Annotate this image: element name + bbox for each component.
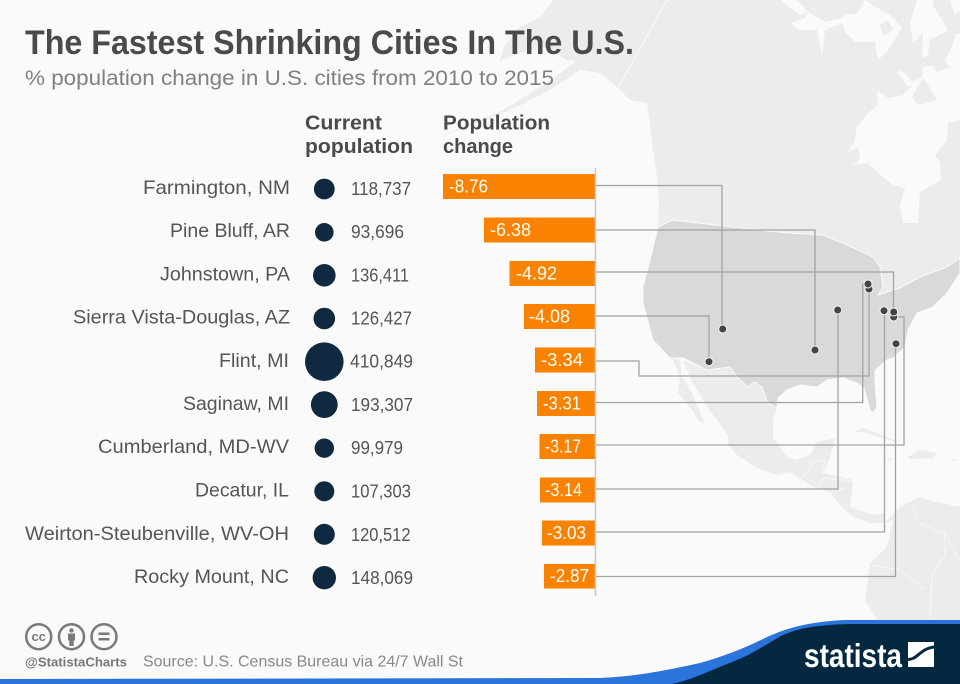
row: Pine Bluff, AR: Pine Bluff, AR: [170, 220, 290, 242]
row: Saginaw, MI: -3.31: [543, 394, 581, 414]
row: Weirton-Steubenville, WV-OH: -3.03: [547, 523, 586, 543]
row: Pine Bluff, AR: [170, 218, 595, 242]
row: Pine Bluff, AR: 93,696: [351, 222, 404, 242]
connector lines from bars to cities: [595, 186, 904, 576]
map: South America borders: [872, 505, 960, 620]
map: South America: [865, 497, 960, 625]
row: Johnstown, PA: -4.92: [516, 264, 557, 284]
row: Rocky Mount, NC: [134, 564, 595, 589]
row: Decatur, IL: 107,303: [351, 482, 411, 502]
column heading: population change: change: [443, 136, 513, 158]
icon: creative commons: [26, 624, 51, 649]
statista logo wordmark: statista: [804, 637, 903, 674]
row: Farmington, NM: -8.76: [449, 177, 488, 197]
row: Johnstown, PA: Johnstown, PA: [160, 264, 290, 286]
map: Central America borders: [803, 460, 853, 490]
icon: creative commons: cc: [31, 629, 46, 644]
row: Flint, MI: -3.34: [541, 350, 583, 370]
map: Arctic channels: [780, 0, 960, 87]
column heading: current population: Current: [305, 112, 382, 134]
column heading: current population: [305, 112, 413, 158]
row: Johnstown, PA: 136,411: [351, 266, 409, 286]
row: Decatur, IL: -3.14: [545, 480, 582, 500]
footer band: navy panel: [672, 624, 960, 684]
map: Southampton Island: [912, 78, 937, 105]
row: Farmington, NM: Farmington, NM: [143, 177, 290, 199]
row: Decatur, IL: Decatur, IL: [195, 480, 289, 502]
row: Saginaw, MI: [183, 391, 595, 418]
column heading: population change: Population: [443, 112, 550, 134]
row: Cumberland, MD-WV: [98, 434, 595, 459]
row: Farmington, NM: 118,737: [351, 179, 411, 199]
row: Saginaw, MI: Saginaw, MI: [183, 393, 289, 415]
column heading: current population: population: [305, 136, 413, 158]
icon: no derivatives: [92, 624, 116, 649]
row: Sierra Vista-Douglas, AZ: 126,427: [351, 308, 412, 328]
map: Alaska border: [618, 0, 667, 88]
row: Rocky Mount, NC: Rocky Mount, NC: [134, 566, 289, 588]
row: Saginaw, MI: 193,307: [351, 395, 413, 415]
row: Rocky Mount, NC: 148,069: [351, 568, 413, 588]
row: Decatur, IL: [195, 478, 595, 502]
row: Sierra Vista-Douglas, AZ: -4.08: [529, 306, 570, 326]
city location dots: [705, 280, 900, 366]
title: The Fastest Shrinking Cities In The U.S.: [25, 24, 634, 62]
row: Weirton-Steubenville, WV-OH: Weirton-Steubenville, WV-OH: [25, 523, 289, 545]
map: contiguous United States: [643, 220, 960, 413]
row: Cumberland, MD-WV: -3.17: [545, 436, 581, 456]
subtitle: % population change in U.S. cities from 2010 to 2015: [25, 67, 554, 90]
row: Flint, MI: 410,849: [350, 352, 413, 372]
map: Baja California: [672, 358, 705, 425]
row: Pine Bluff, AR: -6.38: [490, 220, 531, 240]
row: Flint, MI: Flint, MI: [219, 350, 289, 372]
map: Alaska and Canada: [437, 0, 960, 295]
row: Sierra Vista-Douglas, AZ: Sierra Vista-Douglas, AZ: [73, 306, 290, 328]
statista logo icon: [907, 642, 935, 667]
bar axis line: [595, 168, 596, 596]
row: Rocky Mount, NC: -2.87: [550, 566, 589, 586]
background map of the Americas: [437, 0, 960, 625]
row: Johnstown, PA: [160, 261, 595, 287]
map: Mexico and Central America: [683, 360, 885, 523]
source line: Source: U.S. Census Bureau via 24/7 Wall St: [143, 654, 464, 671]
row: Cumberland, MD-WV: Cumberland, MD-WV: [98, 436, 289, 458]
map: Caribbean islands: [852, 428, 958, 461]
column heading: population change: [443, 112, 550, 158]
icon: attribution: [59, 624, 84, 649]
row: Sierra Vista-Douglas, AZ: [73, 304, 595, 329]
row: Farmington, NM: [143, 174, 595, 199]
row: Weirton-Steubenville, WV-OH: 120,512: [351, 525, 410, 545]
row: Flint, MI: [219, 342, 595, 381]
map: Hudson Bay: [847, 33, 960, 223]
row: Cumberland, MD-WV: 99,979: [351, 438, 403, 458]
footer band: blue swoosh: [0, 620, 960, 684]
row: Weirton-Steubenville, WV-OH: [25, 520, 595, 546]
map: Arctic island: [880, 20, 893, 36]
statista charts handle: @StatistaCharts: [25, 655, 127, 670]
